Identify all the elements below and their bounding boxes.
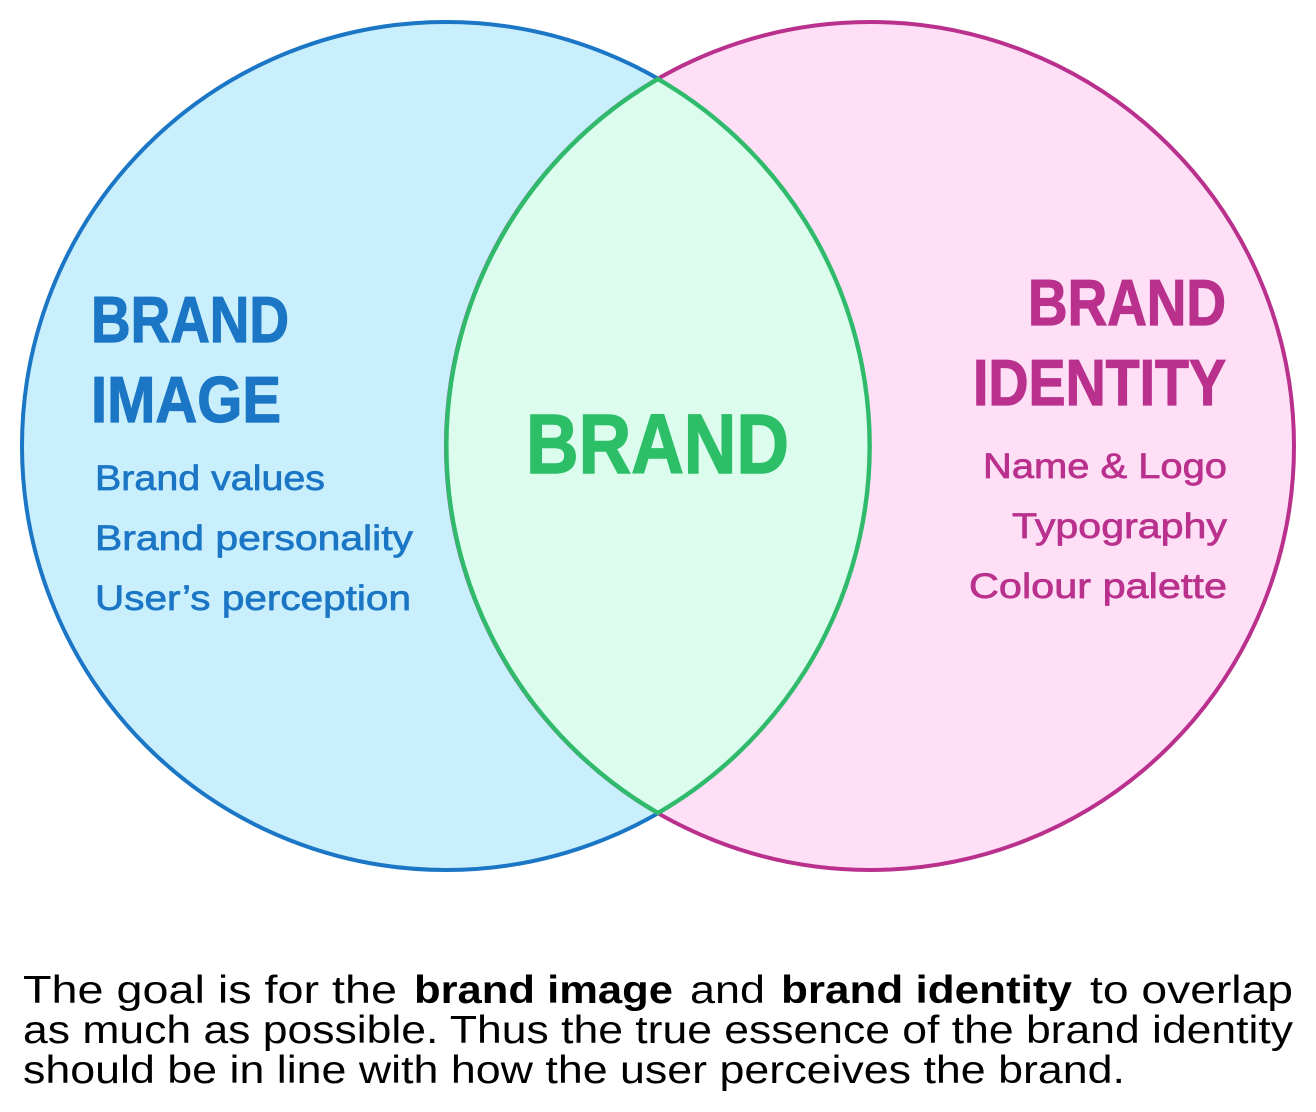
caption text: as much as possible. Thus the true essence of the brand identity xyxy=(23,1009,1294,1052)
heading: brand image: BRAND xyxy=(91,283,289,356)
caption text: brand identity xyxy=(781,969,1072,1012)
heading: brand identity: BRAND xyxy=(1028,266,1226,339)
caption text: to overlap xyxy=(1090,969,1293,1012)
caption text: and xyxy=(690,969,765,1012)
list: brand image items: Brand personality xyxy=(95,519,414,558)
list: brand image items: Brand values xyxy=(95,459,325,498)
list: brand identity items: Colour palette xyxy=(969,567,1227,606)
list: brand image items: User’s perception xyxy=(95,579,411,618)
caption text: brand image xyxy=(414,969,673,1012)
list: brand identity items xyxy=(969,447,1228,606)
caption text: should be in line with how the user perceives the brand. xyxy=(23,1049,1125,1092)
heading: brand image: IMAGE xyxy=(91,363,281,436)
caption text xyxy=(23,969,1294,1092)
heading: brand: BRAND xyxy=(526,397,789,491)
heading: brand identity: IDENTITY xyxy=(973,346,1226,419)
circle: brand image xyxy=(22,22,870,870)
heading: brand identity xyxy=(973,266,1226,419)
caption text: The goal is for the xyxy=(23,969,397,1012)
list: brand identity items: Typography xyxy=(1012,507,1228,546)
heading: brand image xyxy=(91,283,289,436)
list: brand identity items: Name & Logo xyxy=(983,447,1227,486)
overlap: brand xyxy=(446,79,870,813)
list: brand image items xyxy=(95,459,414,618)
circle: brand identity xyxy=(446,22,1294,870)
